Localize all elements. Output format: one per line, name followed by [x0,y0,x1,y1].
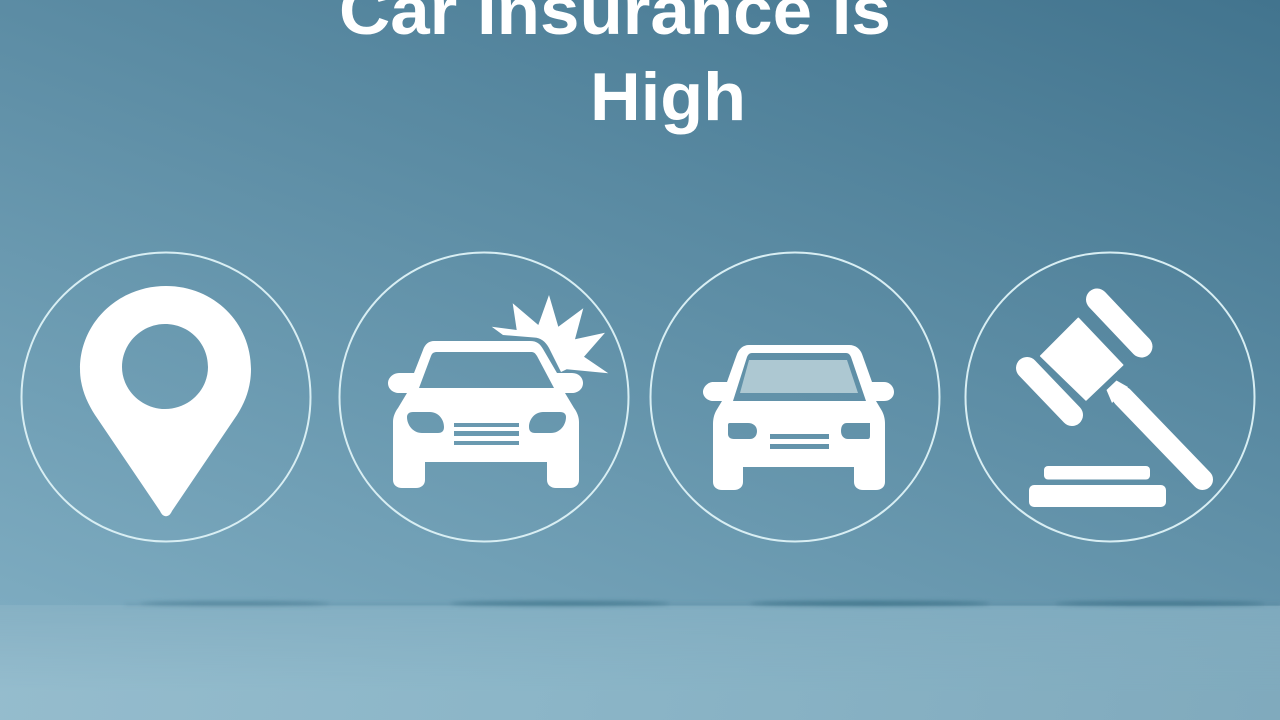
gavel block base [1029,485,1166,507]
gavel bottom bar [1027,368,1072,415]
floor [0,605,1280,720]
floor shadow [125,601,1280,606]
gavel handle [1123,397,1202,480]
gavel top bar [1097,300,1142,346]
gavel head [1041,318,1123,400]
title [339,0,891,135]
gavel neck [1106,380,1128,403]
icon: car with windshield [650,252,940,542]
icon: gavel [966,252,1254,542]
icon: crashed car [340,252,628,542]
icon: location pin [22,252,310,542]
title: High [590,59,746,135]
gavel block top [1044,466,1150,480]
